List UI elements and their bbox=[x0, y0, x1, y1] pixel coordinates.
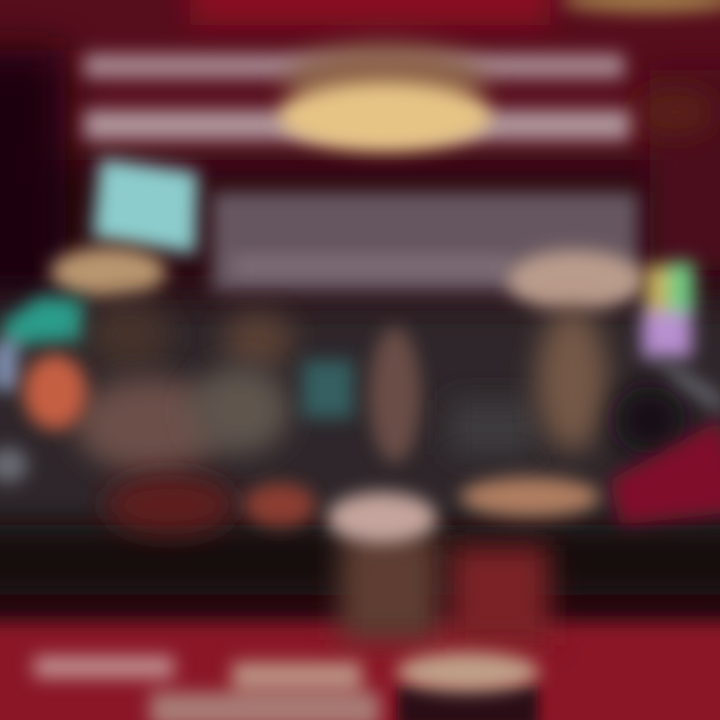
ceiling lamp bbox=[279, 45, 491, 151]
corner lamp bbox=[560, 0, 720, 13]
left figure bbox=[23, 301, 235, 535]
hands bbox=[244, 477, 600, 527]
icon panel: light blue bbox=[92, 158, 198, 254]
centre figure bbox=[369, 327, 421, 463]
right hat bbox=[507, 250, 643, 310]
teal screen centre bbox=[302, 360, 354, 418]
right figure bbox=[450, 308, 720, 455]
heading: blurred title lines bbox=[84, 54, 630, 140]
left bottom pale highlight bbox=[0, 447, 28, 483]
teal icon left bbox=[0, 296, 84, 390]
left hat bbox=[50, 247, 166, 297]
bottom text blur bbox=[34, 656, 380, 720]
red sleeve right bbox=[610, 420, 720, 525]
centre mug bbox=[327, 492, 550, 645]
bottom right cup bbox=[396, 652, 540, 720]
second figure bbox=[190, 312, 294, 454]
rainbow icon right bbox=[642, 262, 694, 358]
table bbox=[0, 622, 720, 720]
text panel: grey bbox=[212, 192, 638, 292]
